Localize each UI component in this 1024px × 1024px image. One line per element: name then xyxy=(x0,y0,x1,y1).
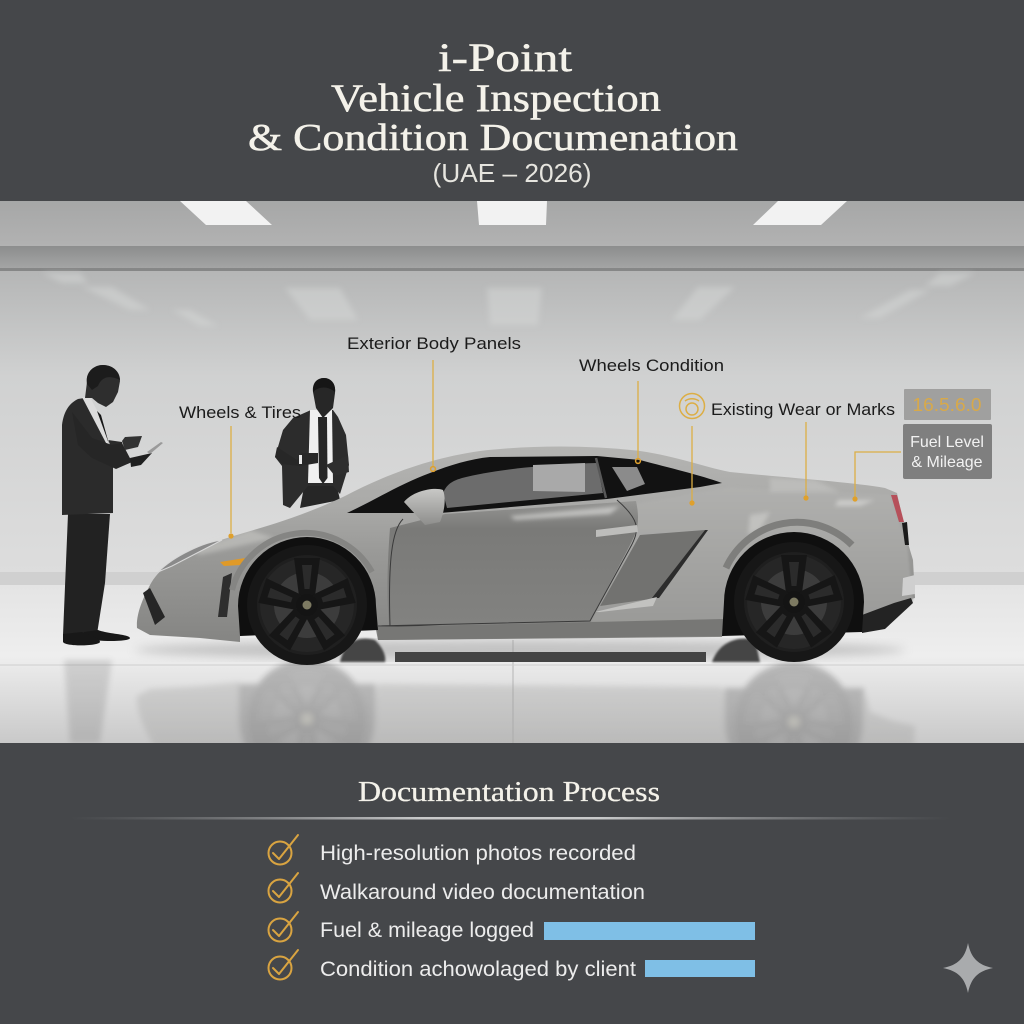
title block: Vehicle Inspection xyxy=(331,77,661,120)
header background xyxy=(0,0,1024,201)
title block xyxy=(248,35,738,188)
footer heading: Documentation Process xyxy=(358,777,660,808)
icon: wear target xyxy=(680,394,704,418)
front shoe xyxy=(63,632,100,645)
jacket xyxy=(275,410,349,508)
car floor reflection xyxy=(63,658,914,743)
label: existing wear or marks: Existing Wear or Marks xyxy=(711,400,895,419)
arch lips xyxy=(232,533,372,590)
sleeve xyxy=(72,412,132,469)
trousers xyxy=(63,514,110,636)
item 4 xyxy=(268,950,755,981)
tie xyxy=(97,411,109,444)
person: left inspector with tablet xyxy=(62,365,163,645)
label: exterior body panels: Exterior Body Panels xyxy=(347,334,521,353)
item 3: Fuel & mileage logged xyxy=(320,919,534,942)
sill xyxy=(377,619,724,640)
body highlights xyxy=(190,478,875,555)
footer background xyxy=(0,743,1024,1024)
rear diffuser xyxy=(862,598,913,633)
item 1: High-resolution photos recorded xyxy=(320,842,636,865)
turn signal xyxy=(220,558,245,566)
upper hand xyxy=(122,436,142,450)
mirror xyxy=(404,489,445,525)
title block: i-Point xyxy=(438,35,572,80)
rear shoe xyxy=(84,630,130,641)
label: wheels condition: Wheels Condition xyxy=(579,356,724,375)
wheel arches xyxy=(238,537,378,636)
rear quarter panel xyxy=(590,487,913,636)
glass reflection xyxy=(533,463,585,492)
leader: wear icon to body xyxy=(689,426,695,506)
tablet xyxy=(147,442,163,454)
device xyxy=(326,455,349,476)
label: exterior body panels xyxy=(347,334,521,471)
hair xyxy=(313,378,335,392)
side windows xyxy=(347,456,722,513)
lower hand xyxy=(130,453,152,467)
side intake xyxy=(600,530,705,606)
door xyxy=(387,501,638,626)
car body xyxy=(137,446,915,642)
jacket xyxy=(62,398,122,515)
item 2: Walkaround video documentation xyxy=(320,881,645,904)
item 2 xyxy=(268,873,645,904)
item 4: Condition achowolaged by client xyxy=(320,958,636,981)
title block: & Condition Documenation xyxy=(248,117,738,159)
title block: (UAE – 2026) xyxy=(432,158,592,188)
tail light xyxy=(891,495,904,522)
door handle xyxy=(596,525,638,537)
leader: wear label to body xyxy=(803,422,809,501)
car floor shadow xyxy=(135,639,905,662)
front vent xyxy=(218,573,232,617)
exhaust xyxy=(902,575,915,596)
head xyxy=(85,365,120,407)
label: wheels condition xyxy=(579,356,724,463)
fuel level and mileage box xyxy=(903,424,992,479)
tie xyxy=(318,417,328,484)
mileage readout xyxy=(904,389,991,420)
label: wheels and tires: Wheels & Tires xyxy=(179,403,301,422)
headlight xyxy=(158,540,222,572)
rear glass reflection xyxy=(612,467,645,491)
item 1 xyxy=(268,835,636,865)
showroom background xyxy=(0,201,1024,743)
item 3 xyxy=(268,912,755,942)
car xyxy=(137,446,915,665)
cuff xyxy=(299,455,302,464)
arm xyxy=(275,447,318,466)
window pillar xyxy=(596,458,606,498)
fuel level and mileage box: Fuel Level xyxy=(910,434,984,451)
shirt collar xyxy=(82,397,110,445)
person: right inspector behind car xyxy=(275,378,349,508)
fuel level and mileage box: & Mileage xyxy=(911,454,983,471)
trousers xyxy=(300,482,340,508)
head xyxy=(313,378,335,418)
rear wheel xyxy=(734,542,854,662)
door glass xyxy=(443,463,603,508)
divider xyxy=(70,817,950,820)
front wheel xyxy=(247,545,367,665)
door lines xyxy=(378,500,724,626)
shirt xyxy=(308,410,333,483)
label: wheels and tires xyxy=(179,403,301,539)
icon: sparkle xyxy=(943,943,993,993)
process checklist xyxy=(268,835,755,981)
leader: fuel level to body xyxy=(852,452,901,502)
mileage readout: 16.5.6.0 xyxy=(912,395,982,415)
front grille xyxy=(143,588,165,625)
hair xyxy=(87,365,120,390)
